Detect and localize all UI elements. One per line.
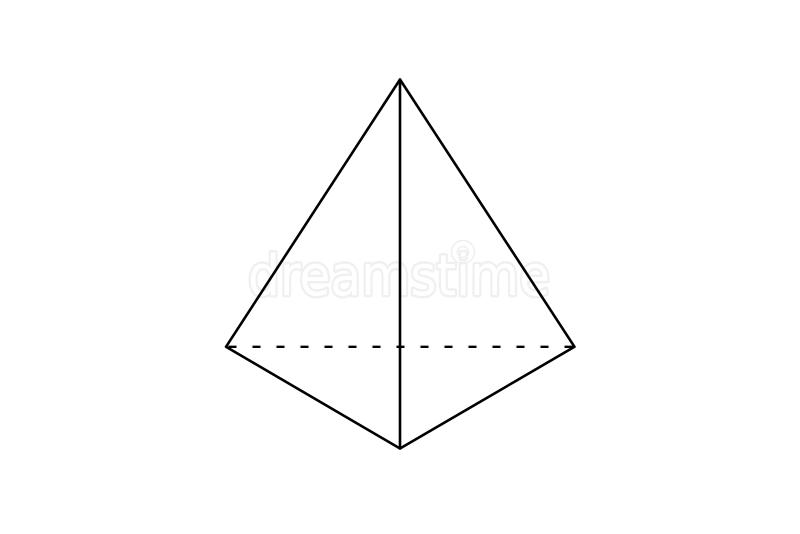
outer edges <box>226 80 574 448</box>
dashed hidden base edge <box>228 346 574 348</box>
central vertical edge <box>399 80 401 448</box>
watermark: dreamstime: dreamstime <box>248 244 550 309</box>
pyramid outline <box>226 80 574 448</box>
